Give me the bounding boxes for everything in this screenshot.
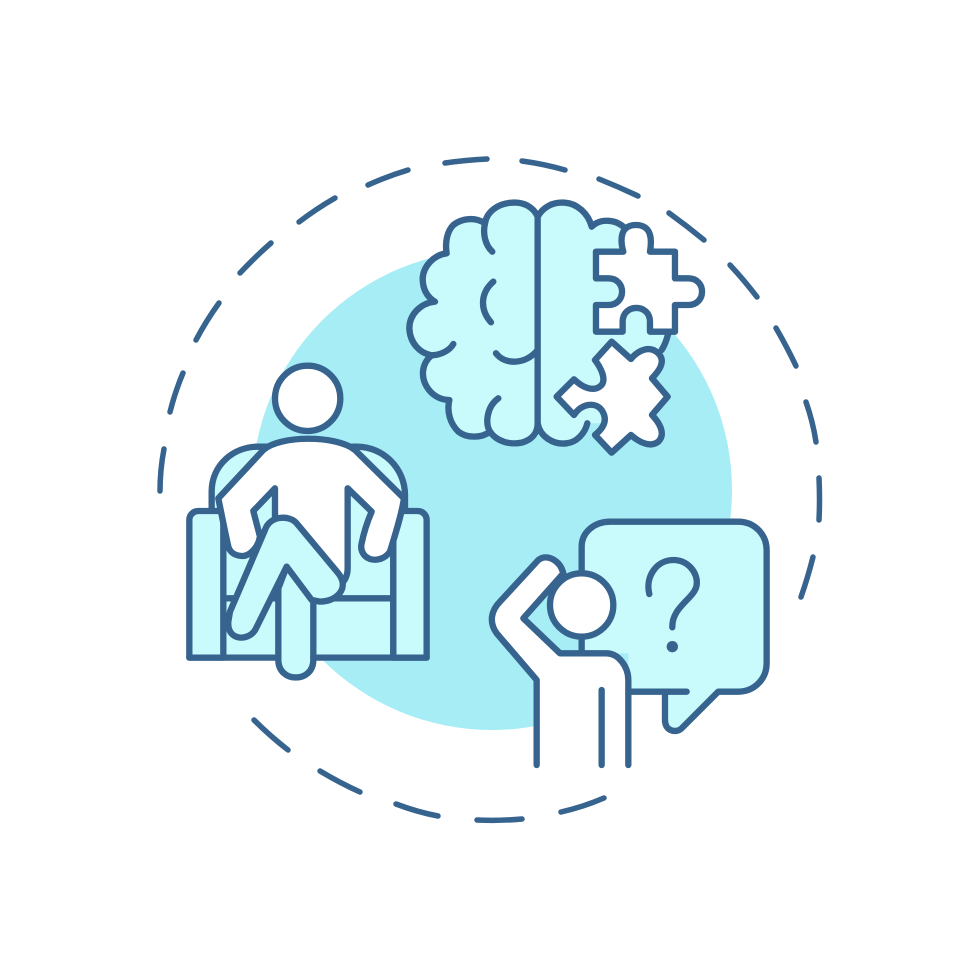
- icon: confused person with question bubble: [492, 522, 767, 765]
- left armrest: [189, 511, 223, 658]
- torso and arms: [218, 439, 404, 600]
- armchair back: [212, 447, 405, 512]
- speech bubble: [582, 522, 767, 731]
- brain folds and outline: [432, 203, 668, 444]
- body outline: [492, 557, 628, 765]
- background circle: [252, 250, 732, 730]
- right armrest: [393, 511, 427, 658]
- body with raised arm: [492, 557, 628, 765]
- brain left hemisphere: [409, 203, 538, 443]
- seat cushion line: [223, 512, 393, 658]
- speech bubble outline: [582, 522, 767, 731]
- brain right hemisphere fill: [538, 203, 670, 444]
- head: [275, 366, 340, 431]
- question mark: [648, 560, 697, 652]
- crossed leg: [228, 518, 343, 638]
- hanging lower leg: [278, 567, 313, 677]
- puzzle piece upper: [596, 225, 702, 332]
- icon: brain with puzzle pieces: [409, 203, 702, 453]
- armchair seat: [222, 508, 395, 658]
- puzzle piece lower: [557, 342, 668, 453]
- chair base line: [189, 648, 427, 667]
- dashed ring: [160, 159, 820, 820]
- head: [550, 573, 613, 637]
- icon: person seated in armchair: [189, 366, 427, 677]
